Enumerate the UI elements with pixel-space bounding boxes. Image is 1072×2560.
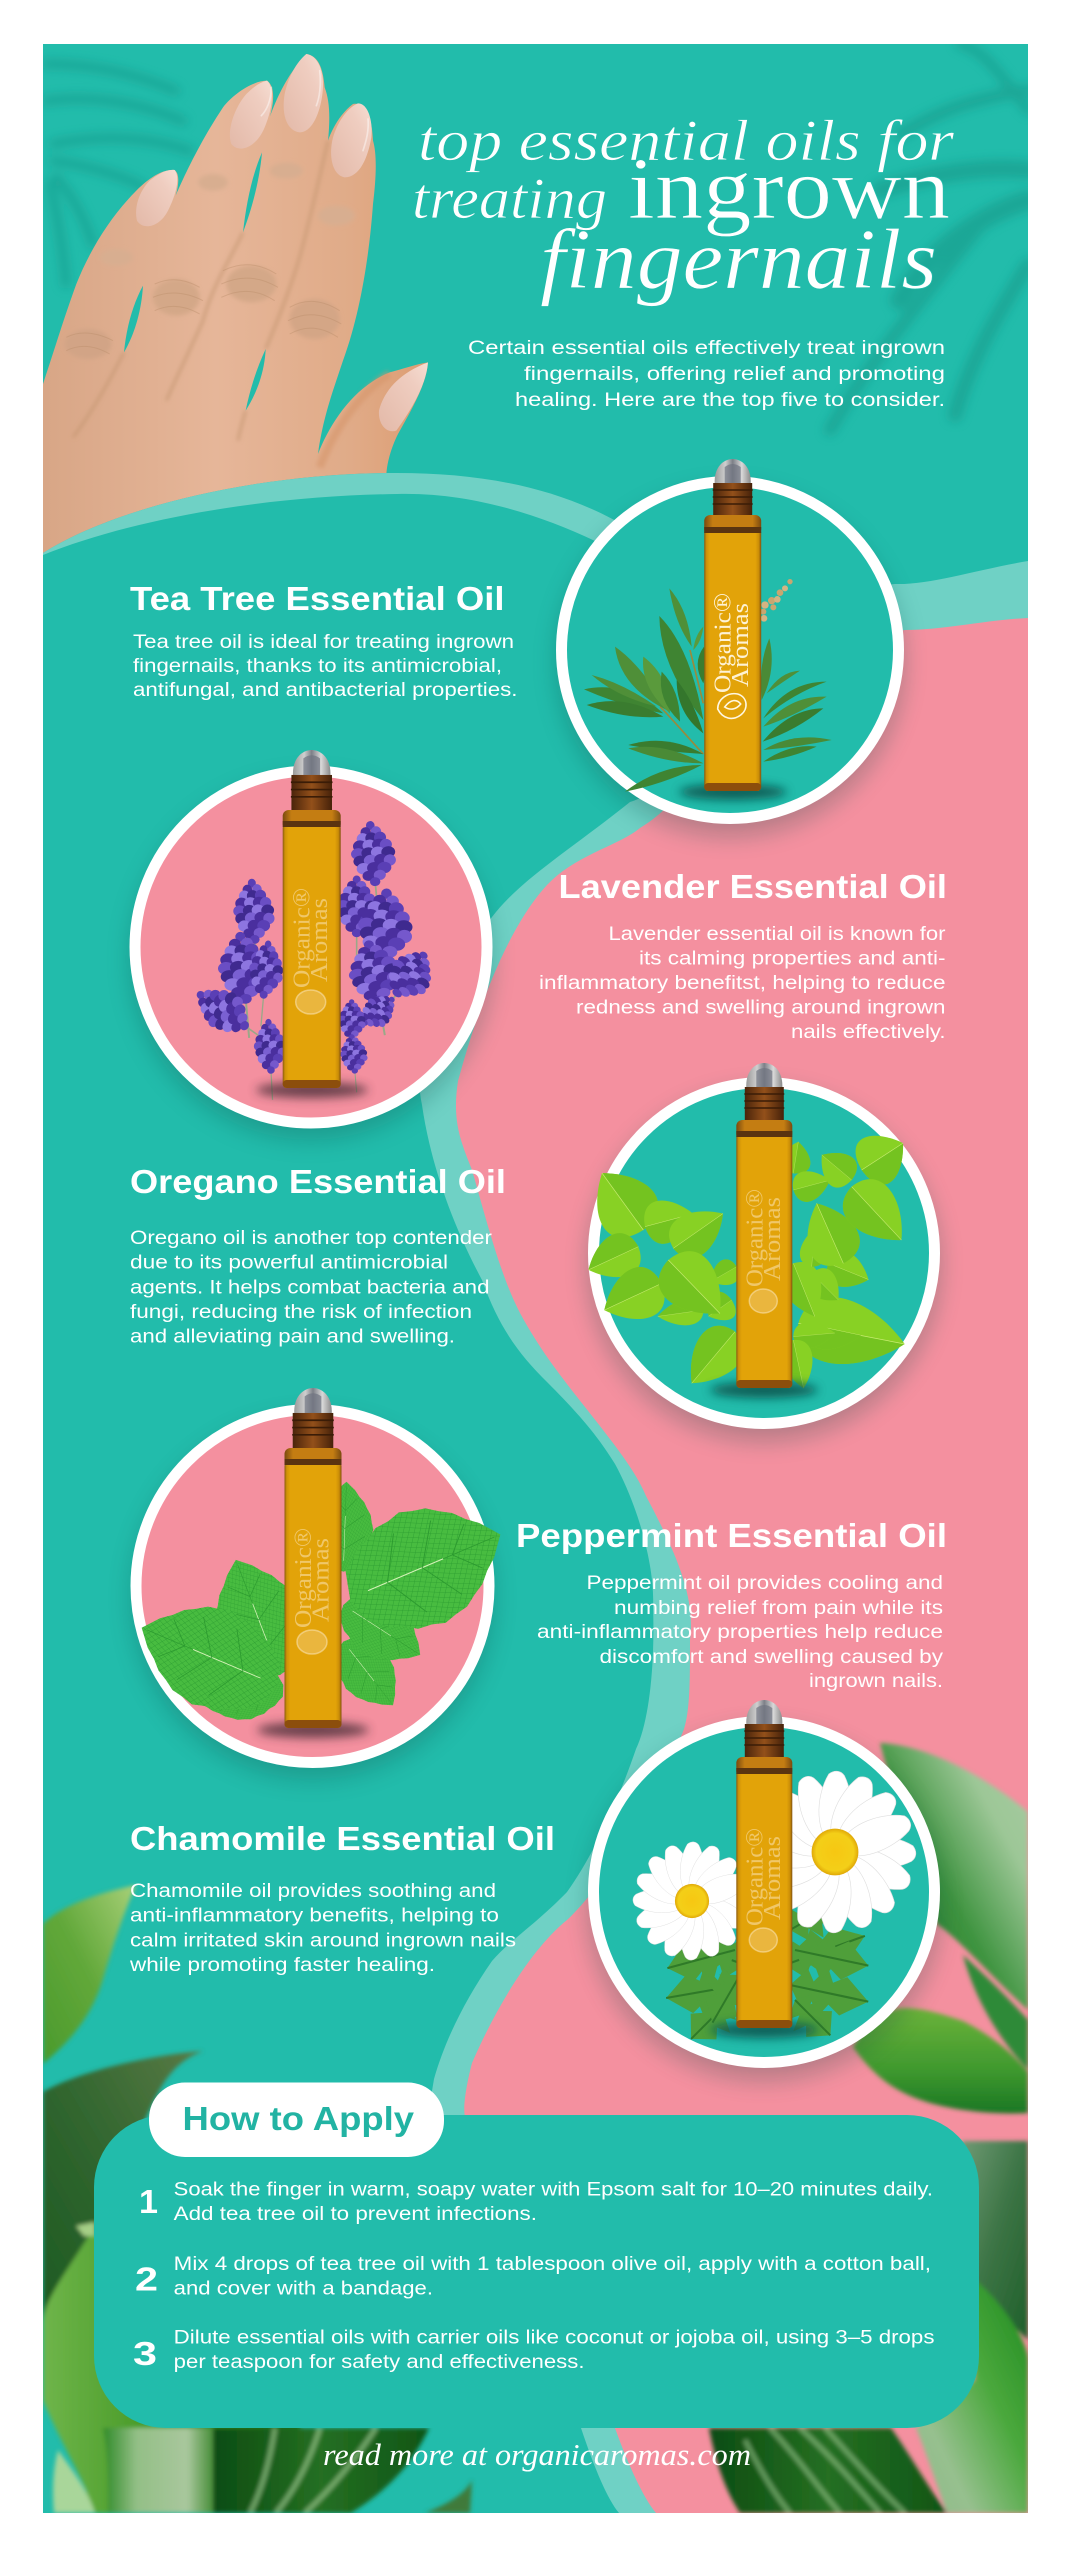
section: peppermint text: discomfort and swelling caused by	[600, 1647, 944, 1668]
leaf: right upper	[880, 1743, 1028, 2010]
plant: peppermint leaves	[122, 1479, 524, 1732]
section: lavender text	[539, 868, 947, 1043]
circle: oregano	[577, 1063, 940, 1441]
section: chamomile text: while promoting faster healing.	[129, 1955, 435, 1976]
section: tea tree text: Tea tree oil is ideal for treating ingrown	[133, 632, 514, 653]
section: tea tree text: antifungal, and antibacterial properties.	[133, 680, 518, 701]
bottle: chamomile: Aromas	[760, 1836, 786, 1920]
section: oregano text: fungi, reducing the risk of infection	[130, 1302, 472, 1323]
leaf: right lower bright	[916, 2280, 1028, 2513]
bottle: peppermint	[284, 1388, 342, 1728]
section: chamomile text: anti-inflammatory benefits, helping to	[130, 1906, 499, 1926]
title: fingernails	[540, 211, 937, 307]
step 3: 3	[133, 2335, 157, 2372]
bottle: lavender: Aromas	[307, 898, 333, 982]
section: chamomile text: calm irritated skin around ingrown nails	[130, 1930, 516, 1952]
step 2	[135, 2254, 931, 2300]
pill heading: how to apply: How to Apply	[182, 2100, 415, 2137]
leaf: bottom left pale	[103, 2428, 215, 2513]
decorative blurred leaves	[43, 1743, 1028, 2513]
teal area under top wave	[43, 473, 386, 578]
section: peppermint text: ingrown nails.	[809, 1671, 943, 1692]
plant: chamomile flowers	[633, 1771, 916, 2055]
bottle: tea tree: Aromas	[728, 603, 754, 687]
section: lavender text: nails effectively.	[791, 1022, 946, 1043]
section: chamomile text: Chamomile Essential Oil	[130, 1820, 555, 1857]
bottle: tea tree	[704, 459, 761, 791]
section: tea tree text: Tea Tree Essential Oil	[130, 580, 504, 617]
section: oregano text: due to its powerful antimicrobial	[130, 1252, 448, 1274]
title	[412, 108, 954, 307]
palm leaf shadows	[46, 44, 1028, 430]
leaf: left bright	[43, 2234, 300, 2513]
leaf: left dark	[43, 2051, 203, 2324]
panel: how to apply	[94, 2082, 979, 2428]
section: lavender text: Lavender Essential Oil	[558, 868, 947, 905]
leaf: left upper	[43, 1885, 136, 2064]
section: peppermint text: Peppermint oil provides cooling and	[586, 1573, 943, 1594]
section: oregano text: agents. It helps combat bacteria and	[130, 1278, 490, 1298]
leaf: left small tip	[76, 2222, 95, 2236]
footer link: read more at organicaromas.com	[323, 2437, 751, 2472]
section: oregano text: Oregano oil is another top contender	[130, 1228, 493, 1249]
bottle: peppermint: Organic®	[291, 1528, 317, 1628]
step 3: Dilute essential oils with carrier oils like coconut or jojoba oil, using 3–5 drops	[174, 2328, 934, 2349]
circle: chamomile	[588, 1700, 940, 2080]
section: oregano text	[130, 1163, 506, 1348]
section: tea tree text	[130, 580, 518, 701]
section: oregano text: Oregano Essential Oil	[130, 1163, 506, 1200]
title: ingrown	[628, 141, 950, 238]
step 1: Soak the finger in warm, soapy water with Epsom salt for 10–20 minutes daily.	[174, 2180, 933, 2200]
section: lavender text: redness and swelling around ingrown	[576, 998, 946, 1018]
section: oregano text: and alleviating pain and swelling.	[130, 1326, 455, 1348]
title: top essential oils for	[418, 108, 954, 173]
top wave band	[43, 473, 614, 555]
bottle: chamomile: Organic®	[742, 1828, 768, 1926]
step 3	[133, 2328, 934, 2373]
intro text: Certain essential oils effectively treat ingrown	[468, 338, 945, 359]
section: lavender text: Lavender essential oil is known for	[608, 924, 946, 945]
section: lavender text: inflammatory benefitst, helping to reduce	[539, 973, 946, 994]
section: peppermint text: anti-inflammatory properties help reduce	[537, 1622, 943, 1643]
pink wave background	[456, 618, 1028, 2513]
section: peppermint text: numbing relief from pain while its	[614, 1598, 943, 1619]
leaf: right lower dark	[962, 2141, 1028, 2340]
leaf: bottom left dark	[213, 2428, 429, 2513]
intro text: healing. Here are the top five to consider.	[515, 390, 945, 411]
pill heading: how to apply	[149, 2082, 444, 2157]
bottle: oregano: Aromas	[760, 1197, 786, 1281]
step 2: Mix 4 drops of tea tree oil with 1 tablespoon olive oil, apply with a cotton ball,	[174, 2254, 931, 2275]
step 3: per teaspoon for safety and effectiveness.	[174, 2352, 584, 2373]
circle: peppermint	[122, 1388, 524, 1779]
bottle: tea tree: Organic®	[711, 593, 737, 693]
section: peppermint text: Peppermint Essential Oil	[516, 1517, 947, 1554]
step 2: 2	[135, 2260, 158, 2298]
leaf: right small	[963, 1955, 1028, 2070]
intro text	[468, 338, 945, 411]
section: peppermint text	[516, 1517, 947, 1692]
intro text: fingernails, offering relief and promoting	[524, 364, 945, 385]
section: tea tree text: fingernails, thanks to its antimicrobial,	[133, 656, 502, 677]
light wave band	[419, 561, 1028, 2513]
leaf: right broad	[853, 2008, 1028, 2113]
bottle: oregano: Organic®	[742, 1189, 768, 1287]
section: chamomile text	[129, 1820, 555, 1976]
bottle: lavender	[283, 750, 341, 1088]
circle: lavender	[130, 750, 492, 1140]
bottle: lavender: Organic®	[290, 888, 316, 988]
leaf: bottom right dark	[709, 2428, 947, 2513]
step 2: and cover with a bandage.	[174, 2278, 433, 2300]
plant: tea tree sprigs	[584, 579, 832, 792]
step 1: 1	[139, 2183, 158, 2220]
hand	[43, 54, 428, 577]
step 1: Add tea tree oil to prevent infections.	[174, 2204, 537, 2225]
bottle: oregano	[736, 1063, 792, 1388]
circle: tea tree	[556, 459, 904, 836]
plant: lavender sprigs	[186, 819, 444, 1101]
section: chamomile text: Chamomile oil provides soothing and	[130, 1881, 496, 1902]
title: treating	[412, 166, 607, 231]
bottle: peppermint: Aromas	[308, 1538, 334, 1622]
bottle: chamomile	[736, 1700, 792, 2028]
section: lavender text: its calming properties and anti-	[639, 948, 946, 970]
leaf: small bottom tip	[425, 2480, 472, 2513]
step 1	[139, 2180, 933, 2225]
plant: oregano leaves	[577, 1121, 920, 1398]
